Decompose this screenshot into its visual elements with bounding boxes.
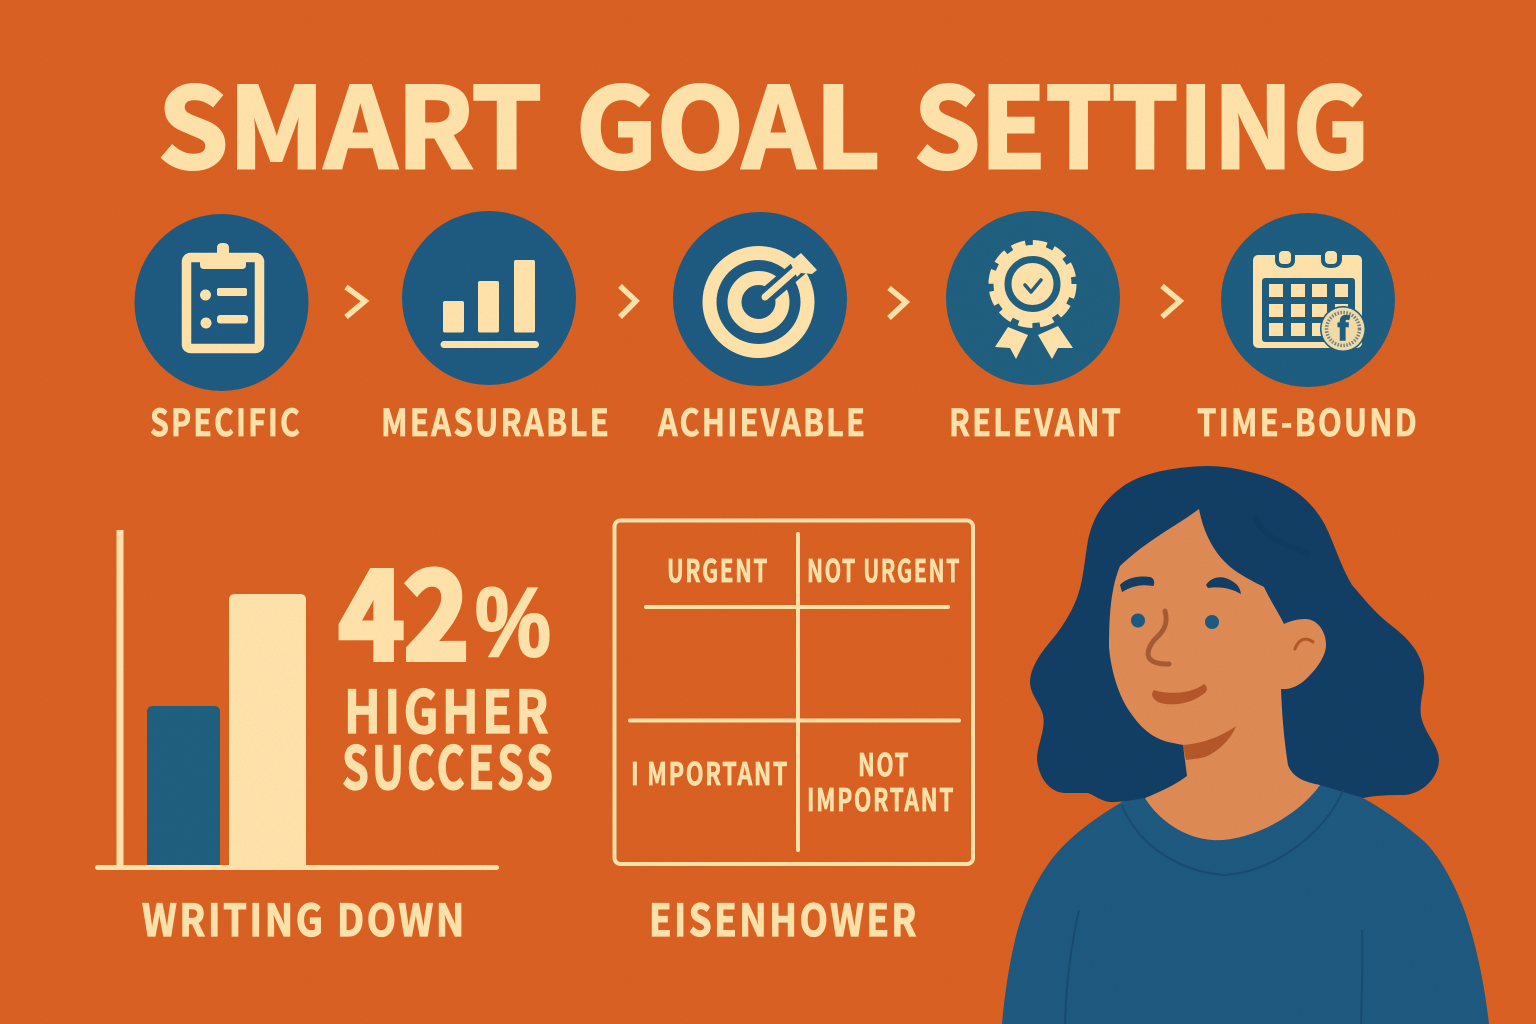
- shirt collar seam: [1122, 790, 1343, 875]
- stat label: higher: HIGHER: [344, 665, 552, 750]
- panel: eisenhower matrix: [614, 520, 973, 949]
- eyebrows: [1120, 576, 1241, 594]
- chart caption: WRITING DOWN: [142, 885, 467, 949]
- icon: target with arrow: [710, 253, 817, 351]
- sleeve seams: [1065, 910, 1362, 1024]
- label: measurable: MEASURABLE: [381, 393, 611, 447]
- title: SMART: [158, 39, 542, 200]
- stat: 42%: [339, 518, 551, 695]
- cell label: not important: [807, 740, 955, 820]
- arrow 1: [346, 287, 365, 317]
- step: achievable: [657, 212, 867, 447]
- arrow 2: [620, 286, 636, 317]
- illustration: woman: [1002, 466, 1489, 1024]
- label: specific: SPECIFIC: [150, 393, 302, 447]
- label: relevant: RELEVANT: [949, 393, 1123, 447]
- step: measurable: [381, 211, 611, 447]
- icon circle: measurable: [402, 211, 576, 385]
- step: relevant: [946, 211, 1123, 447]
- label: achievable: ACHIEVABLE: [657, 393, 867, 447]
- icon circle: specific: [134, 214, 308, 391]
- bar: not written: [147, 706, 220, 865]
- stat: 42%: %: [475, 567, 551, 677]
- icon circle: relevant: [946, 211, 1120, 385]
- step: time-bound: [1197, 213, 1419, 447]
- icon: calendar: [1253, 251, 1366, 352]
- panel: writing down chart: [95, 518, 556, 949]
- icon: clipboard: [186, 243, 260, 348]
- stat: 42%: 42: [339, 518, 469, 695]
- title: SETTING: [914, 39, 1369, 200]
- label: time-bound: TIME-BOUND: [1197, 393, 1419, 447]
- chin shadow: [1183, 726, 1236, 760]
- mouth: [1152, 684, 1207, 704]
- cell label: not important: NOT: [858, 740, 910, 785]
- panel: SMART steps: [134, 211, 1419, 447]
- cell label: important: I MPORTANT: [631, 749, 789, 794]
- stat label: success: SUCCESS: [342, 721, 556, 806]
- eyes: [1131, 614, 1219, 629]
- hair strands: [1255, 515, 1310, 555]
- step: specific: [134, 214, 308, 447]
- chart axes: [116, 530, 124, 867]
- nose: [1148, 611, 1169, 664]
- matrix caption: EISENHOWER: [649, 885, 919, 949]
- shirt: [1002, 785, 1489, 1024]
- cell label: urgent: URGENT: [667, 546, 769, 591]
- icon: round f stamp: f: [1337, 305, 1350, 349]
- cell label: not important: IMPORTANT: [807, 775, 955, 820]
- title: GOAL: [576, 39, 880, 200]
- icon: bar chart: [440, 260, 539, 348]
- matrix dividers: [630, 534, 959, 850]
- icon circle: achievable: [673, 212, 847, 386]
- matrix frame: [614, 520, 973, 864]
- arrow 3: [889, 288, 906, 318]
- bar: written: [229, 594, 306, 867]
- neck and face: [1109, 509, 1326, 840]
- icon: award badge: [992, 243, 1074, 359]
- ear detail: [1295, 639, 1313, 649]
- hair: [1030, 466, 1439, 802]
- icon circle: time-bound: [1221, 213, 1395, 387]
- chart baseline: [95, 865, 499, 870]
- cell label: not urgent: NOT URGENT: [807, 546, 961, 591]
- arrow 4: [1162, 286, 1180, 317]
- title: [158, 39, 1369, 200]
